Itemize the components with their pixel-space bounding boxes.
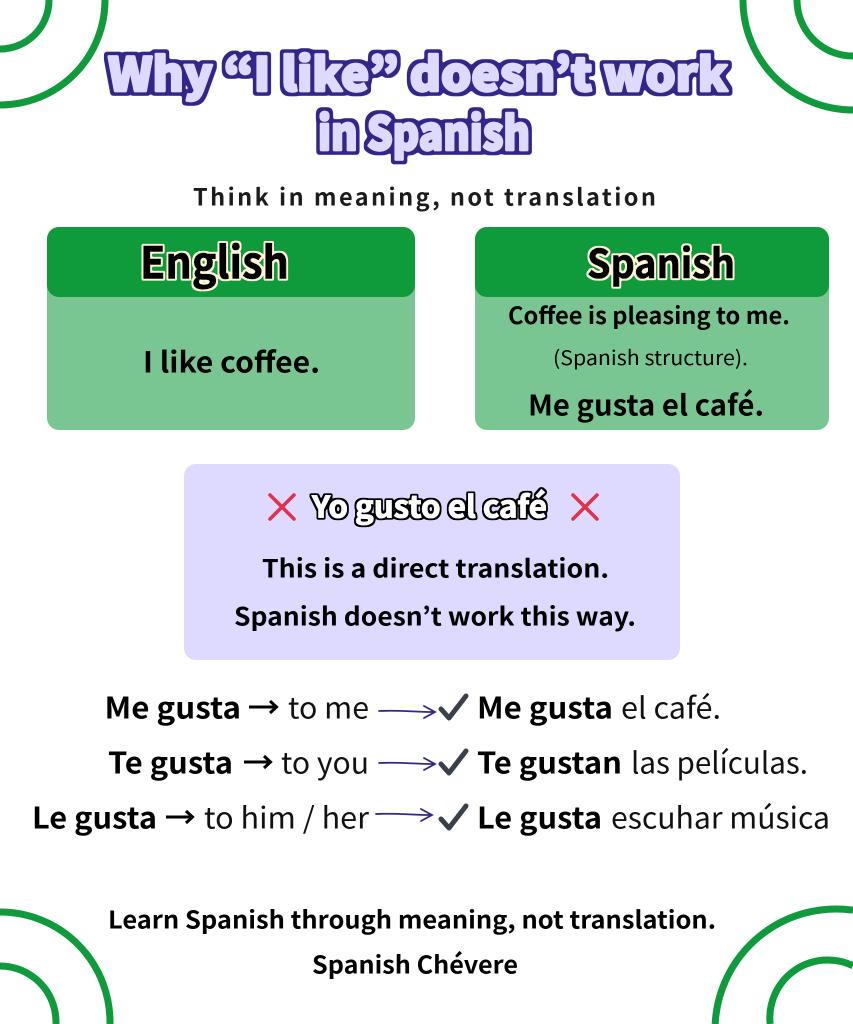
icon: check — [441, 751, 466, 773]
title — [108, 39, 728, 164]
row: Le gusta: to him / her — [204, 796, 370, 838]
purple arrow — [379, 706, 435, 718]
Spanish header bar — [475, 227, 829, 297]
arrow glyph — [166, 811, 192, 823]
row: Te gusta: las películas. — [631, 741, 808, 783]
icon: red cross right — [573, 495, 597, 519]
icon: check — [441, 696, 466, 718]
footer tagline: Learn Spanish through meaning, not translation. — [108, 902, 716, 937]
row: Me gusta — [104, 686, 721, 728]
row: Le gusta: escuhar música — [611, 796, 830, 838]
icon: red cross left — [270, 495, 294, 519]
English header bar — [47, 227, 415, 297]
wrong sentence: Yo gusto el café — [311, 482, 547, 526]
row: Te gusta: Te gusta — [108, 741, 233, 783]
Spanish heading: Spanish — [587, 232, 735, 290]
footer brand: Spanish Chévere — [312, 947, 518, 982]
row: Le gusta — [32, 796, 830, 838]
row: Te gusta: Te gustan — [477, 741, 622, 783]
row: Le gusta: Le gusta — [477, 796, 602, 838]
row: Te gusta — [108, 741, 808, 783]
panel: wrong translation callout — [184, 464, 680, 660]
literal meaning: Coffee is pleasing to me. — [508, 297, 790, 331]
arrow glyph — [244, 756, 270, 768]
panel: English — [47, 227, 415, 430]
row: Me gusta: Me gusta — [104, 686, 241, 728]
subtitle: Think in meaning, not translation — [193, 178, 656, 212]
English example sentence: I like coffee. — [143, 340, 320, 382]
decorative corner arcs: bottom left — [0, 912, 110, 1024]
explanation line 1: This is a direct translation. — [262, 550, 609, 586]
row: Me gusta: to me — [288, 686, 369, 728]
row: Te gusta: to you — [281, 741, 369, 783]
purple arrow — [376, 809, 432, 821]
row: Me gusta: el café. — [621, 686, 721, 728]
icon: check — [441, 806, 466, 828]
panel: Spanish — [475, 227, 829, 430]
title: in Spanish — [318, 98, 530, 164]
decorative corner arcs: bottom right — [715, 909, 853, 1024]
decorative corner arcs: top right — [743, 0, 853, 110]
title: Why “I like” doesn’t work — [108, 39, 728, 105]
decorative corner arcs: top left — [0, 0, 105, 105]
explanation line 2: Spanish doesn’t work this way. — [234, 598, 636, 634]
row: Le gusta: Le gusta — [32, 796, 157, 838]
Spanish example sentence: Me gusta el café. — [528, 384, 764, 424]
arrow glyph — [249, 701, 276, 713]
row: Me gusta: Me gusta — [477, 686, 613, 728]
purple arrow — [379, 758, 435, 770]
English heading: English — [140, 228, 289, 292]
structure note: (Spanish structure). — [553, 342, 748, 371]
